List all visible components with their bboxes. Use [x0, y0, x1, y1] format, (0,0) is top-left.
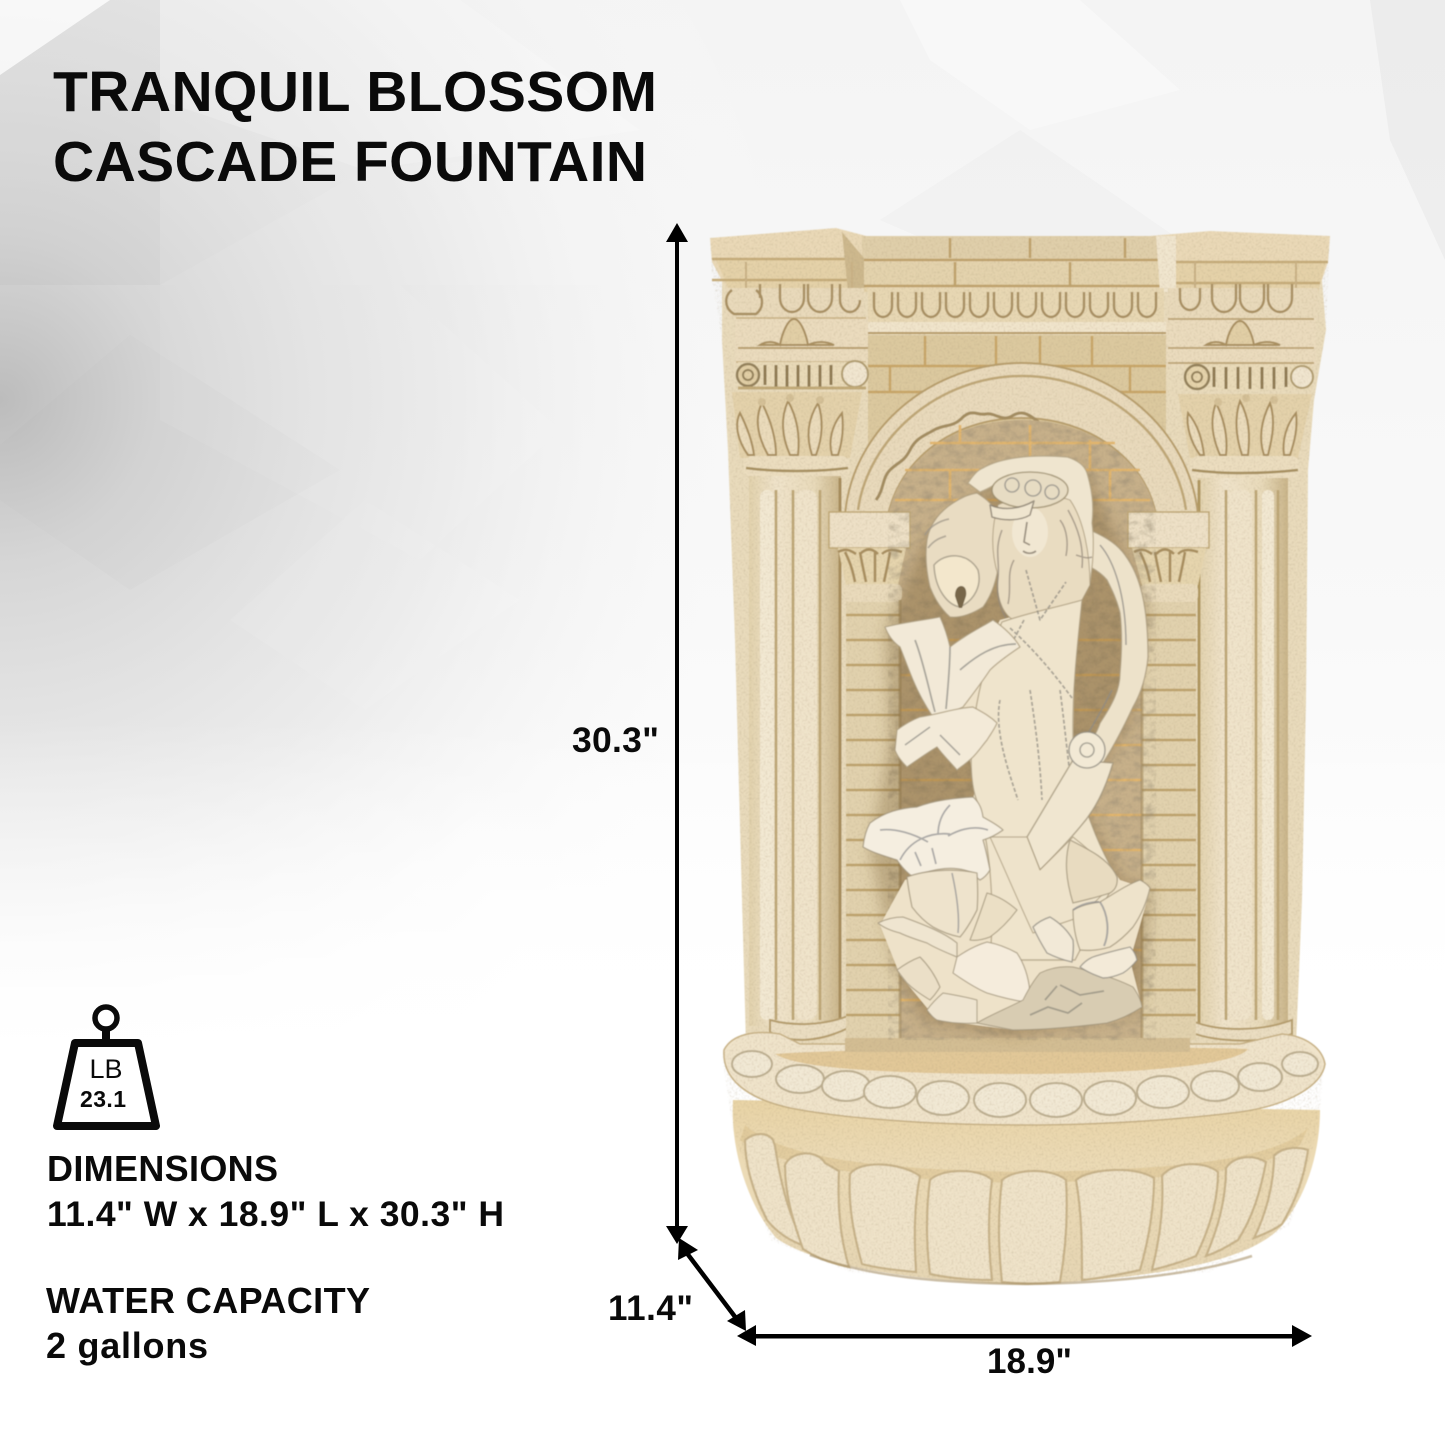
text block: water capacity: 2 gallons — [46, 1325, 208, 1366]
back petal of right lotus — [1066, 840, 1117, 903]
folded leaf — [953, 942, 1030, 1002]
text block: dimensions: 11.4" W x 18.9" L x 30.3" H — [47, 1194, 504, 1234]
flower wreath — [992, 472, 1068, 508]
fountain: small left pilaster — [829, 512, 910, 1040]
icon: weight 23.1 LB — [57, 1007, 156, 1126]
fountain: stone texture overlay — [700, 220, 1340, 1300]
rock base — [977, 967, 1142, 1030]
height dimension arrow — [666, 223, 688, 1244]
text block: water capacity — [46, 1280, 370, 1366]
depth dimension arrow — [678, 1238, 746, 1331]
bowl petals — [745, 1134, 1308, 1284]
text block: water capacity: WATER CAPACITY — [46, 1280, 370, 1321]
icon: weight 23.1 LB: 23.1 — [80, 1086, 126, 1112]
icon: weight 23.1 LB: LB — [89, 1054, 123, 1084]
fountain illustration — [700, 220, 1340, 1300]
fountain: lower bowl — [733, 1100, 1320, 1285]
title: CASCADE FOUNTAIN — [53, 130, 647, 194]
text block: dimensions — [47, 1148, 504, 1234]
fountain: egg-and-dart basin rim — [724, 1033, 1325, 1125]
fountain: niche mottling — [880, 415, 1160, 1045]
drape behind figure — [1073, 530, 1148, 767]
big lily flower head — [863, 797, 1003, 880]
hair and bust — [993, 496, 1090, 623]
fountain: figure cast shadow — [870, 470, 1152, 1035]
fountain: small right pilaster — [1128, 512, 1209, 1040]
lower gown folds — [990, 837, 1117, 933]
sash with daisy — [1027, 760, 1113, 870]
fountain: right acanthus capital — [1178, 394, 1312, 478]
text block: dimensions: DIMENSIONS — [47, 1148, 278, 1189]
water jar — [926, 493, 1001, 617]
fountain: shadow edges of niche — [900, 600, 1142, 1040]
fountain: left acanthus capital — [732, 392, 862, 478]
height label: 30.3" — [572, 720, 659, 760]
length dimension arrow — [737, 1325, 1312, 1347]
fountain: upper wall bricks — [868, 322, 1166, 445]
fountain: left capital — [735, 317, 868, 388]
depth label: 11.4" — [608, 1289, 693, 1328]
lily bell — [907, 870, 978, 937]
fountain: left column shaft — [749, 476, 848, 1040]
fountain: maiden figure — [863, 456, 1150, 1030]
length label: 18.9" — [987, 1342, 1072, 1381]
right lotus — [1033, 917, 1073, 962]
fountain: back wall silhouette — [722, 280, 1326, 1045]
figure underlay — [880, 600, 1150, 1030]
fountain: arch — [845, 363, 1198, 515]
basin water opening — [775, 1048, 1248, 1074]
title — [53, 60, 657, 194]
title: TRANQUIL BLOSSOM — [53, 60, 657, 124]
raised arm — [968, 456, 1093, 595]
upper lily — [885, 617, 1020, 717]
fountain: top cornice — [710, 228, 1330, 292]
fountain: niche back wall — [880, 420, 1156, 1040]
lily leaves — [970, 893, 1017, 940]
fountain: right column shaft — [1190, 478, 1292, 1041]
face — [1012, 507, 1048, 557]
leaves under lily — [895, 707, 997, 770]
fountain: egg-and-dart frieze — [726, 284, 1318, 324]
fountain: right capital — [1166, 318, 1316, 390]
necklace and gown — [971, 600, 1117, 960]
